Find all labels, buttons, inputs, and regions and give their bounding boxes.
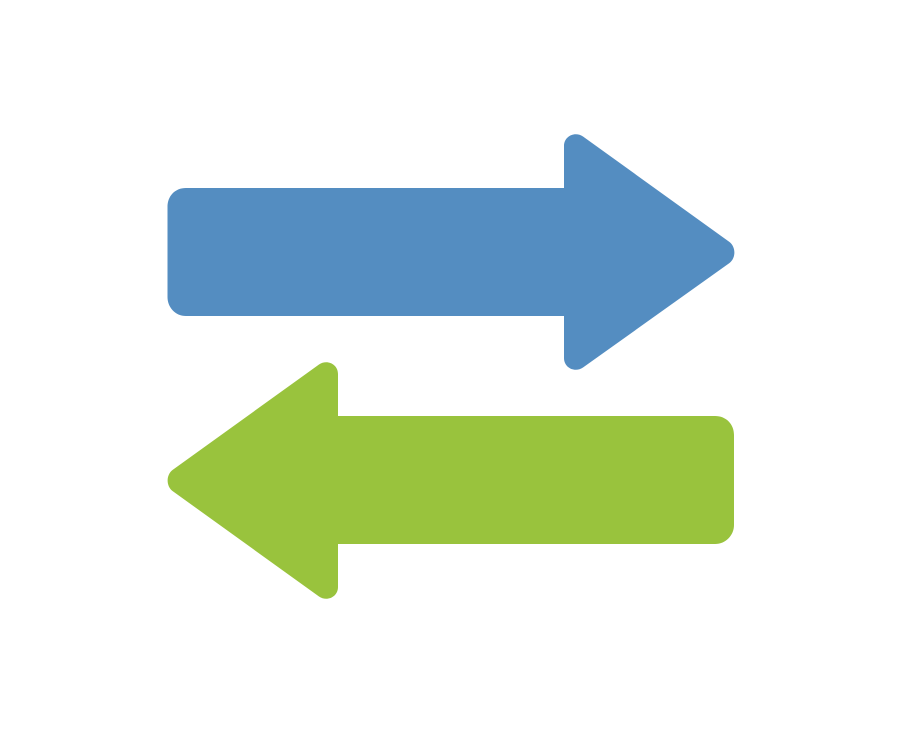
arrow: blue pointing right [168, 134, 734, 370]
arrow: green pointing left [168, 362, 734, 599]
